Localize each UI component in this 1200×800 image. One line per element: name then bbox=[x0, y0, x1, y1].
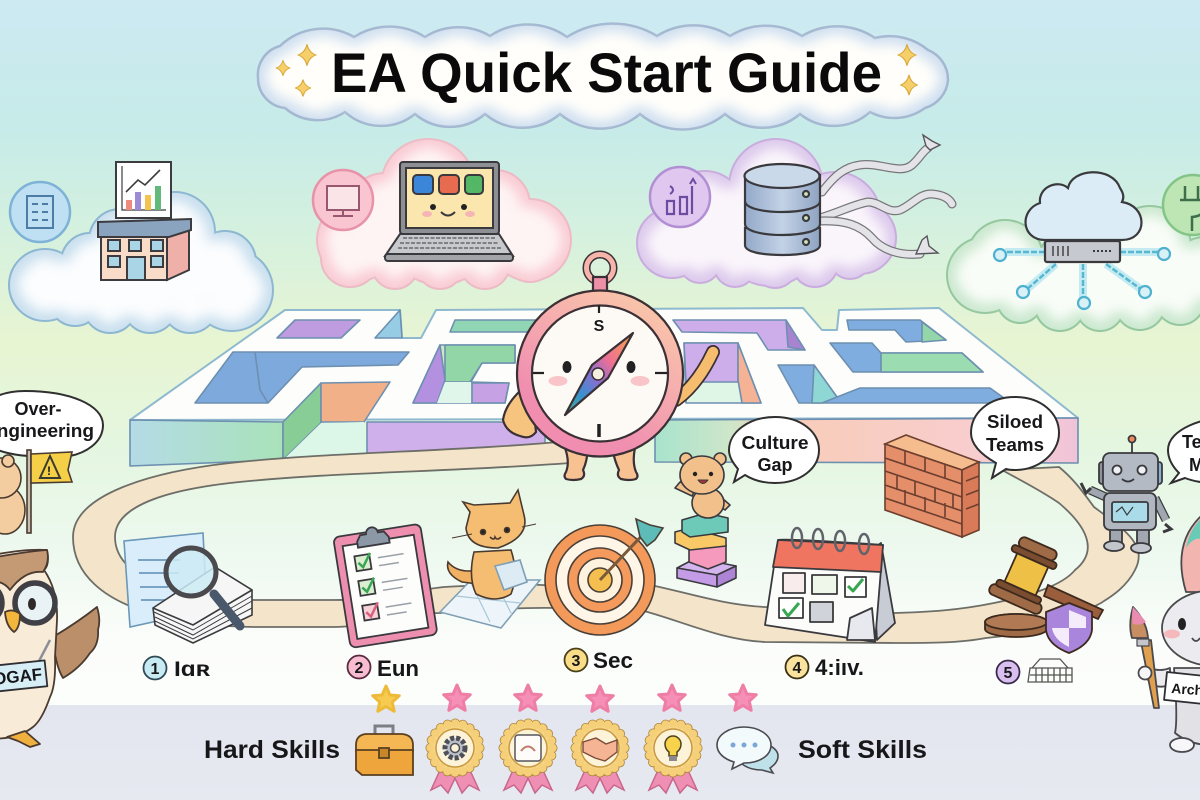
icon: network connections bbox=[994, 248, 1170, 309]
character: owl with TOGAF badge bbox=[0, 550, 99, 747]
bottom skills band background bbox=[0, 705, 1200, 800]
title cloud bbox=[258, 24, 948, 130]
character: robot bbox=[1081, 436, 1171, 553]
path section: left loop bbox=[73, 441, 570, 627]
step 5: gavel and shield bbox=[985, 532, 1103, 653]
step 5 label: 5 bbox=[1004, 665, 1013, 682]
icon: building with chart bbox=[98, 162, 191, 280]
bubble: siloed teams: Siloed bbox=[987, 412, 1043, 432]
label: soft skills: Soft Skills bbox=[798, 736, 927, 764]
maze bbox=[130, 308, 1078, 466]
icon: shield bbox=[1046, 603, 1092, 653]
step 2 label: 2 bbox=[355, 660, 364, 677]
star: pink 4 bbox=[659, 685, 685, 710]
rabbit head bbox=[1162, 590, 1200, 666]
rabbit ear bbox=[1181, 517, 1200, 592]
bear on tower bbox=[675, 453, 730, 518]
maze front left wall bbox=[130, 420, 283, 466]
bubble: over-engineering: Over- bbox=[14, 399, 62, 419]
compass pointing arm bbox=[676, 352, 713, 400]
compass mascot bbox=[503, 254, 713, 480]
owl glasses bbox=[0, 583, 55, 623]
icon: ribbons from database bbox=[820, 135, 952, 254]
star: gold bbox=[373, 686, 399, 711]
step 1 label bbox=[144, 656, 211, 681]
compass left arm bbox=[503, 390, 536, 437]
character: bear with warning flag bbox=[0, 450, 72, 534]
bubble: siloed teams: Teams bbox=[986, 435, 1044, 455]
character: rabbit with paintbrush bbox=[1130, 517, 1200, 752]
icon: cloud server bbox=[1026, 172, 1142, 262]
maze purple front wall bbox=[367, 422, 545, 460]
title: EA Quick Start Guide bbox=[331, 41, 882, 104]
owl wing bbox=[53, 607, 99, 678]
rabbit arm bbox=[1148, 668, 1170, 687]
maze orange floor bbox=[321, 382, 390, 422]
badge: TOGAF bbox=[0, 660, 47, 693]
step 3 label bbox=[564, 648, 633, 673]
block tower with bear bbox=[675, 453, 736, 587]
step 2: checklist clipboard bbox=[333, 520, 438, 648]
icon: brick wall bbox=[885, 435, 979, 537]
compass face bbox=[532, 306, 668, 442]
star: pink 3 bbox=[587, 686, 613, 711]
compass letter: S bbox=[594, 318, 605, 335]
star: pink 2 bbox=[515, 685, 541, 710]
step 4 label: 4 bbox=[793, 660, 802, 677]
bubble: siloed teams bbox=[971, 397, 1059, 478]
icon: temple glyph bbox=[1028, 659, 1072, 682]
skills bar bbox=[204, 685, 927, 793]
icon: toolbox bbox=[356, 726, 413, 775]
bubble: tech mess bbox=[1168, 417, 1200, 484]
bubble: culture gap: Gap bbox=[757, 455, 793, 475]
cloud: data architecture bbox=[638, 135, 952, 287]
rabbit body bbox=[1174, 668, 1200, 745]
step 5 label bbox=[996, 659, 1072, 684]
icon: blue building badge bbox=[10, 182, 70, 242]
maze top surface bbox=[130, 308, 1078, 420]
maze holes left bbox=[195, 310, 540, 403]
step 2 label: Eun bbox=[377, 656, 419, 681]
step 4: calendar bbox=[765, 528, 895, 642]
step 1 label: 1 bbox=[151, 661, 160, 678]
path section: right curve bbox=[640, 467, 1139, 643]
medal: gear bbox=[430, 724, 480, 793]
icon: green plug badge bbox=[1163, 175, 1200, 235]
step 1 label: Iɑʀ bbox=[174, 658, 211, 681]
character: cat on a map bbox=[440, 490, 540, 628]
step 3: target with arrow bbox=[545, 519, 663, 635]
cloud: application architecture bbox=[313, 140, 570, 288]
maze opening floor bbox=[283, 422, 367, 460]
step 4 label bbox=[786, 655, 864, 680]
icon: paintbrush bbox=[1130, 607, 1159, 708]
bubble: culture gap: Culture bbox=[742, 433, 808, 453]
icon: chat bubbles bbox=[717, 727, 778, 773]
step 4 label: 4:iıv. bbox=[815, 655, 864, 680]
owl head cap bbox=[0, 550, 48, 590]
badge: architect bbox=[1164, 672, 1200, 705]
cloud: business architecture bbox=[10, 162, 272, 332]
medal: blueprint bbox=[504, 724, 552, 793]
medal: handshake bbox=[576, 724, 624, 793]
step 3 label: Sec bbox=[593, 648, 633, 673]
medal: light bulb bbox=[648, 724, 698, 793]
step 3 label: 3 bbox=[572, 653, 581, 670]
compass needle bbox=[565, 333, 633, 415]
maze right front wall bbox=[655, 418, 1078, 463]
icon: database cylinder bbox=[744, 164, 820, 255]
cloud: technology architecture bbox=[948, 172, 1200, 330]
compass ring bbox=[517, 290, 683, 456]
winding path bbox=[73, 441, 1139, 643]
icon: purple chart badge bbox=[650, 167, 710, 227]
blocks bbox=[675, 513, 736, 587]
bubble: over-engineering bbox=[0, 391, 103, 456]
star: pink 5 bbox=[730, 685, 756, 710]
icon: smiling laptop bbox=[385, 162, 513, 261]
label: hard skills: Hard Skills bbox=[204, 736, 340, 764]
star: pink 1 bbox=[444, 685, 470, 710]
step 2 label bbox=[348, 656, 419, 681]
compass loop bbox=[586, 254, 614, 282]
icon: pink monitor badge bbox=[313, 170, 373, 230]
bubble: culture gap bbox=[729, 417, 819, 483]
compass legs bbox=[564, 448, 588, 480]
character: bear with warning flag: ! bbox=[47, 464, 51, 478]
maze green inner wall bbox=[283, 383, 321, 460]
step 1: documents and magnifier bbox=[124, 533, 252, 643]
maze holes right bbox=[673, 320, 1011, 403]
owl body bbox=[0, 550, 57, 739]
